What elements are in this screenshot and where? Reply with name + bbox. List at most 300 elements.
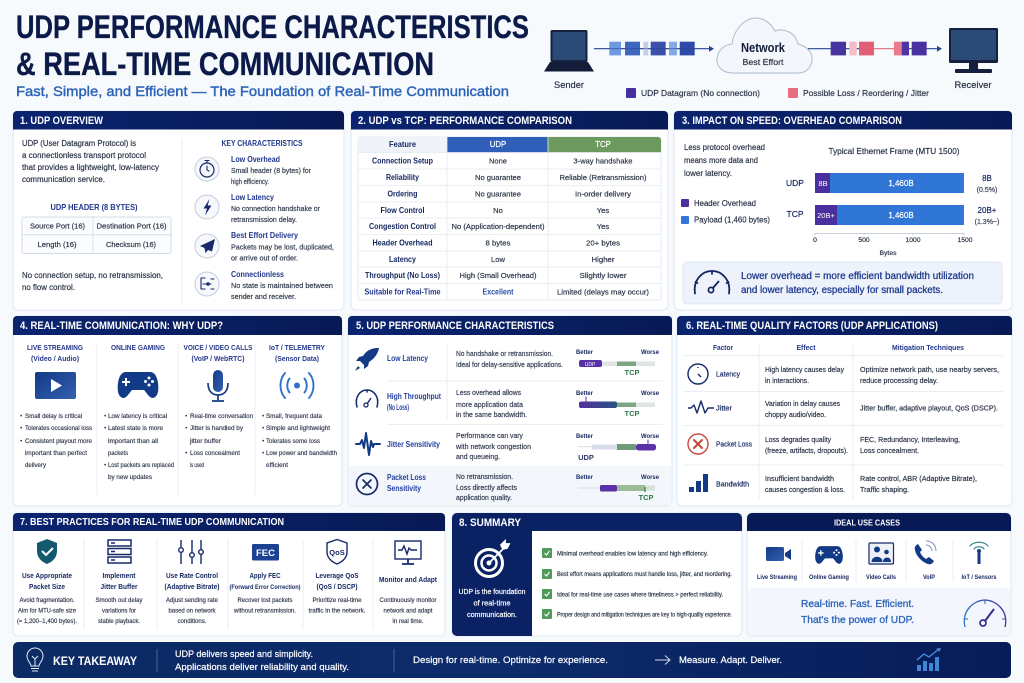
row: low latency: Ideal for delay-sensitive applications. <box>456 360 563 369</box>
practice: jitter buffer: Jitter Buffer <box>100 582 138 591</box>
icon: growth chart <box>917 648 941 671</box>
row: throughput <box>356 388 659 419</box>
arrow: sender to network <box>594 48 712 50</box>
column: IoT: • <box>262 413 265 420</box>
comparison table: Suitable for Real-Time <box>364 288 441 296</box>
panel: 7 best practices <box>13 513 445 636</box>
characteristic: low latency: No connection handshake or <box>231 204 321 213</box>
practice: monitor <box>379 541 437 625</box>
characteristic: best effort: Best Effort Delivery <box>231 231 299 240</box>
comparison table: Yes <box>597 222 609 231</box>
use case: online gaming <box>809 546 849 581</box>
column: IoT: Simple and lightweight <box>266 425 330 432</box>
row: packet loss <box>688 434 960 455</box>
takeaway message: Applications deliver reliability and quality. <box>175 662 349 672</box>
scale: latency: UDP <box>585 362 596 368</box>
panel: 6 real-time quality factors <box>677 316 1012 506</box>
scale: jitter: Better <box>576 433 593 440</box>
practice: QoS: traffic in the network. <box>308 608 366 614</box>
comparison table: UDP <box>490 140 506 149</box>
key takeaway banner <box>13 642 1011 678</box>
heading: 6. REAL-TIME QUALITY FACTORS (UDP APPLICATIONS) <box>686 320 938 332</box>
key characteristics heading: KEY CHARACTERISTICS <box>222 139 302 148</box>
characteristic: low latency: Low Latency <box>231 193 275 202</box>
comparison table <box>358 137 661 300</box>
legend <box>681 199 770 224</box>
bar chart: 8B <box>818 179 828 188</box>
use case: video calls: Video Calls <box>866 574 896 581</box>
practice: packet size: Avoid fragmentation. <box>20 597 75 604</box>
column: voice and video calls: is used <box>190 462 204 469</box>
panel: 2 UDP vs TCP <box>351 111 668 310</box>
icon: signal bars <box>689 474 708 492</box>
scale: jitter: UDP <box>578 453 594 462</box>
datagrams: incoming <box>831 42 927 55</box>
row: latency: in interactions. <box>765 376 809 385</box>
characteristic: low latency <box>231 193 321 224</box>
callout <box>683 262 1002 304</box>
row: throughput: more application data <box>456 400 524 409</box>
row: packet loss: Packet Loss <box>387 473 426 482</box>
legend: Payload (1,460 bytes) <box>694 216 770 224</box>
row: packet loss: Loss directly affects <box>456 483 517 492</box>
column: voice and video calls: • <box>185 450 188 457</box>
characteristic: connectionless: sender and receiver. <box>231 292 296 301</box>
scale: throughput: TCP <box>624 409 640 418</box>
UDP header table <box>22 217 171 254</box>
panel: 8 summary <box>452 513 742 636</box>
scale: packet loss: Worse <box>641 474 659 481</box>
bar chart: Typical Ethernet Frame (MTU 1500) <box>828 146 960 156</box>
row: jitter: and queueing. <box>456 452 500 461</box>
bar chart: 20B+ <box>817 211 835 220</box>
row: jitter <box>688 399 998 419</box>
use case: online gaming: Online Gaming <box>809 574 849 581</box>
icon: gamepad <box>118 372 158 398</box>
footnote <box>22 271 163 292</box>
scale: latency: TCP <box>624 368 640 377</box>
bar chart: Bytes <box>880 250 897 257</box>
icon: microphone <box>208 370 228 401</box>
column: online gaming: Latest state is more <box>108 425 163 432</box>
title: UDP PERFORMANCE CHARACTERISTICS <box>16 9 529 45</box>
practice: FEC: Recover lost packets <box>238 597 292 604</box>
row: latency: reduce processing delay. <box>860 376 938 385</box>
row: throughput: in the same bandwidth. <box>456 410 527 419</box>
row: low latency <box>355 348 659 377</box>
icon: stopwatch <box>195 157 219 181</box>
icon: light bulb <box>27 648 43 671</box>
row: jitter: Jitter <box>716 404 732 412</box>
practice: monitor: Monitor and Adapt <box>379 575 437 584</box>
bar chart: UDP <box>786 178 804 188</box>
column: online gaming <box>104 343 174 481</box>
practice: jitter buffer <box>96 540 143 625</box>
characteristic: connectionless <box>231 270 333 301</box>
column: live streaming <box>20 343 93 469</box>
legend: loss: Possible Loss / Reordering / Jitter <box>803 88 929 98</box>
icon: FEC badge: FEC <box>256 548 275 559</box>
column headings <box>713 343 964 352</box>
bar chart: 0 <box>813 237 817 244</box>
column: online gaming: • <box>104 413 107 420</box>
practice: QoS: (QoS / DSCP) <box>316 582 358 591</box>
bar chart: 500 <box>858 237 870 244</box>
scale: packet loss: TCP <box>638 493 654 502</box>
intro text: UDP (User Datagram Protocol) is <box>22 139 136 148</box>
icon: rocket <box>355 348 379 371</box>
column: voice and video calls: VOICE / VIDEO CALLS <box>184 343 253 352</box>
practice: packet size <box>17 539 77 625</box>
scale: latency: Better <box>576 349 593 356</box>
column: online gaming: by new updates <box>108 474 153 481</box>
scale: packet loss <box>576 474 659 502</box>
heading: 3. IMPACT ON SPEED: OVERHEAD COMPARISON <box>682 115 902 127</box>
icon: red cross <box>688 434 708 454</box>
use case: VoIP: VoIP <box>923 574 935 581</box>
comparison table: Flow Control <box>380 206 424 215</box>
column: live streaming: • <box>20 438 23 445</box>
scale: jitter <box>576 433 659 462</box>
comparison table: Connection Setup <box>372 156 433 165</box>
checklist: Ideal for real-time use cases where timeliness > perfect reliability. <box>557 592 723 598</box>
practice: packet size: Packet Size <box>29 582 65 591</box>
row: throughput: High Throughput <box>387 392 441 401</box>
icon: gamepad <box>815 546 843 564</box>
title <box>16 9 529 82</box>
icon: network cloud <box>717 18 812 73</box>
comparison table: Throughput (No Loss) <box>365 271 440 280</box>
practice: jitter buffer: Implement <box>102 571 136 580</box>
column: IoT: Low power and bandwidth <box>266 450 337 457</box>
network flow diagram <box>544 18 998 98</box>
use case: video calls <box>866 543 896 581</box>
practice: rate control: (Adaptive Bitrate) <box>164 582 220 591</box>
takeaway message <box>175 649 349 672</box>
column: live streaming: Small delay is critical <box>25 413 82 420</box>
column: voice and video calls: jitter buffer <box>189 438 222 445</box>
comparison table: 20+ bytes <box>586 238 620 248</box>
column: voice and video calls <box>184 343 253 469</box>
comparison table: 8 bytes <box>486 238 511 248</box>
row: jitter: Variation in delay causes <box>765 399 840 408</box>
sender label: Sender <box>554 80 584 91</box>
icon: paper plane <box>195 234 219 258</box>
practice: rate control: Use Rate Control <box>166 571 218 580</box>
use case: VoIP <box>915 541 936 581</box>
characteristic: best effort: Packets may be lost, duplicated, <box>231 242 334 252</box>
comparison table: No (Application-dependent) <box>452 222 545 231</box>
characteristic: best effort: or arrive out of order. <box>231 254 298 262</box>
comparison table: Higher <box>592 255 615 264</box>
use case: live streaming: Live Streaming <box>757 574 797 581</box>
column: IoT: (Sensor Data) <box>275 354 319 363</box>
column: live streaming: LIVE STREAMING <box>27 343 83 352</box>
summary statement: UDP is the foundation <box>458 588 526 596</box>
practice: monitor: Continuously monitor <box>380 597 436 604</box>
heading: 5. UDP PERFORMANCE CHARACTERISTICS <box>356 320 554 332</box>
characteristic: low latency: retransmission delay. <box>231 215 297 224</box>
icon: target <box>476 541 509 576</box>
icon: phone <box>915 541 936 564</box>
cloud label: Best Effort <box>742 57 784 67</box>
practice: FEC <box>230 544 300 614</box>
practice: packet size: Use Appropriate <box>22 571 72 580</box>
column: voice and video calls: • <box>185 413 188 420</box>
row: bandwidth: Bandwidth <box>716 480 749 488</box>
scale: latency <box>576 349 659 377</box>
practice: FEC: (Forward Error Correction) <box>230 584 300 591</box>
practice: packet size: Aim for MTU-safe size <box>18 608 77 614</box>
row: bandwidth <box>689 474 977 494</box>
summary statement <box>458 588 526 619</box>
column headings: Factor <box>713 343 733 352</box>
row: jitter <box>356 431 659 462</box>
callout: and lower latency, especially for small packets. <box>741 285 943 296</box>
scale: jitter: Worse <box>641 433 659 440</box>
column: live streaming: important than perfect <box>25 450 87 457</box>
icon: clock <box>688 364 708 384</box>
comparison table: 3-way handshake <box>574 156 632 165</box>
comparison table: No guarantee <box>475 190 521 198</box>
bar chart: 1500 <box>957 237 973 244</box>
characteristic: best effort <box>231 231 334 262</box>
characteristic: low overhead: Small header (8 bytes) for <box>231 166 312 175</box>
row: throughput: Less overhead allows <box>456 388 521 397</box>
column: online gaming: ONLINE GAMING <box>111 343 165 352</box>
bar chart: (0.5%) <box>977 187 997 194</box>
practice: rate control: Adjust sending rate <box>166 597 219 604</box>
row: packet loss: Loss concealment. <box>860 446 919 455</box>
checklist <box>542 548 732 619</box>
row: packet loss: Loss degrades quality <box>765 435 831 444</box>
column: live streaming: Consistent playout more <box>25 438 92 445</box>
summary statement: communication. <box>467 611 517 619</box>
use case: IoT <box>962 542 997 581</box>
comparison table: Reliable (Retransmission) <box>560 173 647 182</box>
icon: shield <box>37 539 57 564</box>
heading: 2. UDP vs TCP: PERFORMANCE COMPARISON <box>358 115 572 127</box>
comparison table: TCP <box>595 140 611 149</box>
row: packet loss: (freeze, artifacts, dropouts). <box>765 446 848 455</box>
comparison table: No guarantee <box>475 173 521 182</box>
closing message: Measure. Adapt. Deliver. <box>679 655 782 665</box>
row: low latency: Low Latency <box>387 354 428 363</box>
callout: Lower overhead = more efficient bandwidth utilization <box>741 271 974 282</box>
row: bandwidth: Rate control, ABR (Adaptive Bitrate), <box>860 474 977 483</box>
heading: 7. BEST PRACTICES FOR REAL-TIME UDP COMMUNICATION <box>20 517 284 528</box>
icon: circled cross <box>356 474 378 494</box>
checklist: Proper design and mitigation techniques are key to high-quality experience. <box>557 612 732 618</box>
footnote: no flow control. <box>22 283 75 292</box>
legend: datagram: UDP Datagram (No connection) <box>641 88 760 98</box>
bar chart: TCP <box>786 209 804 219</box>
row: bandwidth: Traffic shaping. <box>860 485 909 494</box>
row: latency <box>688 364 999 385</box>
practice: QoS <box>308 540 366 614</box>
practice: FEC: Apply FEC <box>250 571 281 580</box>
scale: packet loss: Better <box>576 474 593 481</box>
practice: packet size: (≈ 1,200–1,400 bytes). <box>17 618 77 625</box>
icon: wave <box>688 401 714 413</box>
row: jitter: with network congestion <box>455 442 531 451</box>
icon: QoS shield: QoS <box>329 548 345 557</box>
column: online gaming: • <box>104 425 107 432</box>
use case: live streaming <box>757 547 797 581</box>
heading: IDEAL USE CASES <box>834 518 900 528</box>
intro text: a connectionless transport protocol <box>22 151 146 160</box>
takeaway label: KEY TAKEAWAY <box>53 656 137 668</box>
column: voice and video calls: • <box>185 425 188 432</box>
comparison table: Latency <box>389 255 417 264</box>
row: jitter: Jitter Sensitivity <box>387 440 440 449</box>
practice: rate control <box>164 540 220 625</box>
scale: throughput: Worse <box>641 390 659 397</box>
column: voice and video calls: Real-time conversation <box>190 413 253 420</box>
column: IoT: Small, frequent data <box>266 413 322 420</box>
practice: FEC: without retransmission. <box>233 608 296 614</box>
column: IoT: Tolerates some loss <box>266 438 321 445</box>
icon: connectionless <box>195 272 219 296</box>
description <box>684 143 765 178</box>
characteristic: low overhead: high efficiency. <box>231 177 269 186</box>
tagline <box>801 598 914 626</box>
icon: video call frame <box>869 543 894 564</box>
datagrams: outgoing <box>609 42 695 55</box>
icon: gauge <box>695 271 729 294</box>
row: low latency: No handshake or retransmission. <box>456 349 553 358</box>
row: throughput: (No Loss) <box>387 403 409 412</box>
icon: server stack <box>108 540 131 563</box>
use case: IoT: IoT / Sensors <box>962 574 997 581</box>
panel: 1 UDP overview <box>13 111 344 310</box>
practice: monitor: network and adapt <box>384 608 433 614</box>
panel: 4 real-time communication <box>13 316 342 506</box>
cloud label: Network <box>741 41 785 55</box>
icon: monitor pulse <box>395 541 421 564</box>
row: packet loss <box>356 472 659 502</box>
cloud label <box>741 41 785 67</box>
row: packet loss: Sensitivity <box>387 484 421 493</box>
arrow: network to receiver <box>808 46 942 52</box>
column: live streaming: delivery <box>25 462 47 469</box>
legend: Header Overhead <box>694 199 756 208</box>
panel: 3 overhead comparison <box>674 111 1012 310</box>
column: online gaming: Low latency is critical <box>108 413 167 420</box>
description: means more data and <box>684 156 758 165</box>
row: latency: Latency <box>716 370 740 378</box>
practice: rate control: conditions. <box>178 618 207 625</box>
tagline: Real-time. Fast. Efficient. <box>801 598 914 610</box>
column headings: Effect <box>796 343 816 352</box>
scale: throughput <box>576 390 659 418</box>
checklist: Minimal overhead enables low latency and high efficiency. <box>557 552 708 558</box>
row: bandwidth: causes congestion & loss. <box>765 485 845 494</box>
tagline: That's the power of UDP. <box>801 614 914 626</box>
comparison table: Limited (delays may occur) <box>557 288 649 296</box>
column: live streaming: • <box>20 425 23 432</box>
comparison table: Congestion Control <box>369 222 436 231</box>
checklist: Best effort means applications must handle loss, jitter, and reordering. <box>557 572 732 578</box>
heading: 8. SUMMARY <box>459 517 522 529</box>
comparison table: Slightly lower <box>580 271 627 280</box>
bar chart: 20B+ <box>978 206 997 215</box>
icon: antenna <box>970 542 988 564</box>
UDP header table: Length (16) <box>38 240 77 249</box>
comparison table: Yes <box>597 206 609 215</box>
receiver label: Receiver <box>954 80 992 91</box>
row: jitter: choppy audio/video. <box>765 410 826 419</box>
panel: ideal use cases <box>747 513 1011 636</box>
intro text: that provides a lightweight, low-latency <box>22 163 159 172</box>
row: latency: High latency causes delay <box>765 365 844 374</box>
characteristic: connectionless: No state is maintained between <box>231 281 333 290</box>
row: jitter: Jitter buffer, adaptive playout, QoS (DSCP). <box>860 404 998 412</box>
heading: 4. REAL-TIME COMMUNICATION: WHY UDP? <box>20 320 223 332</box>
column: IoT <box>262 343 337 469</box>
column: IoT: IoT / TELEMETRY <box>269 343 325 352</box>
bar chart: (1.3%~) <box>975 219 999 226</box>
column: live streaming: Tolerates occasional loss <box>25 425 93 432</box>
comparison table: Excellent <box>482 288 514 296</box>
comparison table: Reliability <box>386 173 420 182</box>
icon: lightning <box>195 195 219 219</box>
comparison table: In-order delivery <box>575 190 631 198</box>
row: packet loss: FEC, Redundancy, Interleaving, <box>860 435 960 444</box>
icon: video camera <box>766 547 791 561</box>
column: IoT: • <box>262 438 265 445</box>
UDP header table: Destination Port (16) <box>96 222 167 230</box>
column: online gaming: packets <box>108 450 129 457</box>
footnote: No connection setup, no retransmission, <box>22 271 163 280</box>
UDP header table: Source Port (16) <box>30 222 85 230</box>
subtitle: Fast, Simple, and Efficient — The Foundation of Real-Time Communication <box>16 83 509 99</box>
panel: 5 UDP performance characteristics <box>348 316 672 506</box>
column: voice and video calls: Jitter is handled by <box>190 425 244 432</box>
practice: QoS: Prioritize real-time <box>312 597 362 604</box>
icon: speed gauge <box>964 600 1006 627</box>
icon: gauge <box>356 390 378 407</box>
description: lower latency. <box>684 169 732 178</box>
title: & REAL-TIME COMMUNICATION <box>16 46 434 82</box>
icon: sender laptop <box>544 30 594 72</box>
column: online gaming: Lost packets are replaced <box>108 462 174 469</box>
arrow <box>655 656 670 664</box>
bar chart <box>786 146 999 257</box>
scale: throughput: Better <box>576 390 593 397</box>
practice: jitter buffer: variations for <box>102 608 136 614</box>
UDP header table: Checksum (16) <box>106 240 156 249</box>
column: live streaming: • <box>20 413 23 420</box>
bar chart: 8B <box>982 174 992 183</box>
bar chart: 1000 <box>905 237 921 244</box>
column: IoT: • <box>262 450 265 457</box>
comparison table: No <box>493 206 503 215</box>
row: bandwidth: Insufficient bandwidth <box>765 474 834 483</box>
summary statement: of real-time <box>474 600 511 608</box>
intro text: communication service. <box>22 175 105 184</box>
bar chart: 1,460B <box>888 179 914 188</box>
column headings: Mitigation Techniques <box>892 343 964 352</box>
description: Less protocol overhead <box>684 143 765 152</box>
icon: play <box>35 372 76 399</box>
row: latency: Optimize network path, use nearby servers, <box>860 365 999 374</box>
column: IoT: • <box>262 425 265 432</box>
scale: latency: Worse <box>641 349 659 356</box>
heading: 1. UDP OVERVIEW <box>20 115 104 127</box>
practice: rate control: based on network <box>168 608 216 614</box>
column: online gaming: important than all <box>108 438 158 445</box>
